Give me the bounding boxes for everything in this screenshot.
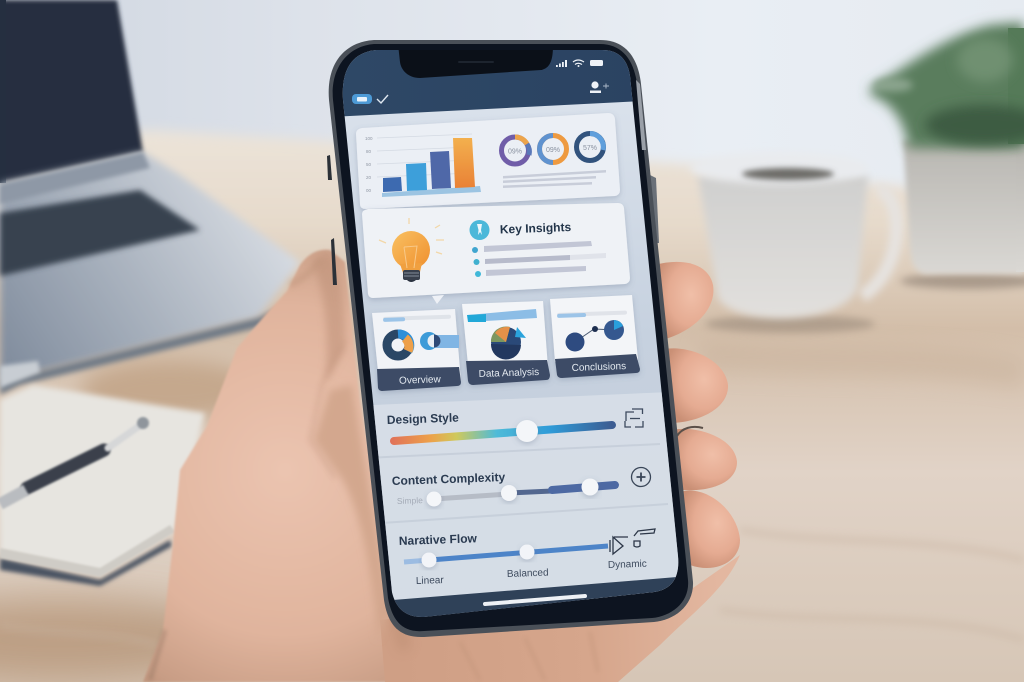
narrative flow slider bbox=[399, 529, 655, 587]
panel: overview card bbox=[372, 309, 461, 391]
background: notebook and pen bbox=[0, 385, 205, 586]
content complexity slider: Content Complexity bbox=[392, 470, 506, 488]
phone screen bbox=[342, 50, 678, 617]
slider labels: Linear bbox=[416, 575, 445, 587]
slider labels bbox=[416, 560, 646, 584]
icon: toggle badge and check bbox=[352, 94, 388, 104]
phone body bbox=[327, 40, 693, 637]
icon: insights pin bbox=[470, 220, 490, 240]
donut charts: 09% bbox=[546, 147, 560, 154]
hand: palm and thumb bbox=[143, 250, 740, 682]
bottom home bar area bbox=[394, 577, 676, 617]
status header bar bbox=[342, 50, 632, 116]
panel: key insights card bbox=[362, 203, 630, 298]
background: coffee cup bbox=[690, 152, 897, 333]
label: data analysis: Data Analysis bbox=[478, 367, 539, 380]
content complexity slider: Simple bbox=[397, 495, 423, 506]
bar chart: 00 bbox=[366, 188, 372, 193]
narrative flow slider: Narative Flow bbox=[399, 531, 478, 548]
icon: light bulb bbox=[379, 218, 444, 282]
conclusions chart bbox=[557, 311, 627, 352]
design style slider: Design Style bbox=[387, 410, 459, 427]
label: overview: Overview bbox=[399, 374, 442, 387]
bar chart bbox=[365, 134, 481, 197]
notch bbox=[398, 50, 553, 78]
slider labels: Dynamic bbox=[608, 559, 647, 571]
bar chart: 80 bbox=[366, 149, 372, 154]
data analysis chart bbox=[467, 309, 537, 360]
pointer tip bbox=[432, 295, 444, 304]
icon: frame minus bbox=[625, 409, 643, 427]
lower settings shading bbox=[373, 392, 678, 600]
slider labels: Balanced bbox=[507, 568, 549, 580]
panel: charts card bbox=[356, 113, 620, 209]
hand: fingers bbox=[655, 262, 740, 568]
text placeholder lines bbox=[503, 170, 606, 188]
donut charts bbox=[502, 134, 604, 164]
donut charts: 57% bbox=[583, 145, 597, 152]
donut charts: 09% bbox=[508, 148, 522, 156]
insight bullets bbox=[472, 241, 606, 277]
label: conclusions: Conclusions bbox=[571, 361, 626, 374]
bar chart: 20 bbox=[366, 175, 372, 180]
heading: key insights: Key Insights bbox=[500, 220, 572, 236]
status icons: signal, wifi, battery bbox=[556, 60, 603, 67]
background: laptop bbox=[0, 0, 300, 395]
icon: flow arrow bbox=[610, 529, 655, 554]
panel: data analysis card bbox=[462, 301, 550, 385]
icon: user add bbox=[590, 81, 609, 93]
overview charts bbox=[383, 315, 459, 356]
content complexity slider bbox=[392, 468, 650, 506]
panel: conclusions card bbox=[550, 295, 640, 378]
bar chart: 50 bbox=[366, 162, 372, 167]
background: potted plant bbox=[870, 22, 1024, 289]
icon: plus circle bbox=[632, 468, 650, 486]
bar chart: 100 bbox=[365, 136, 373, 141]
design style slider bbox=[387, 409, 643, 442]
